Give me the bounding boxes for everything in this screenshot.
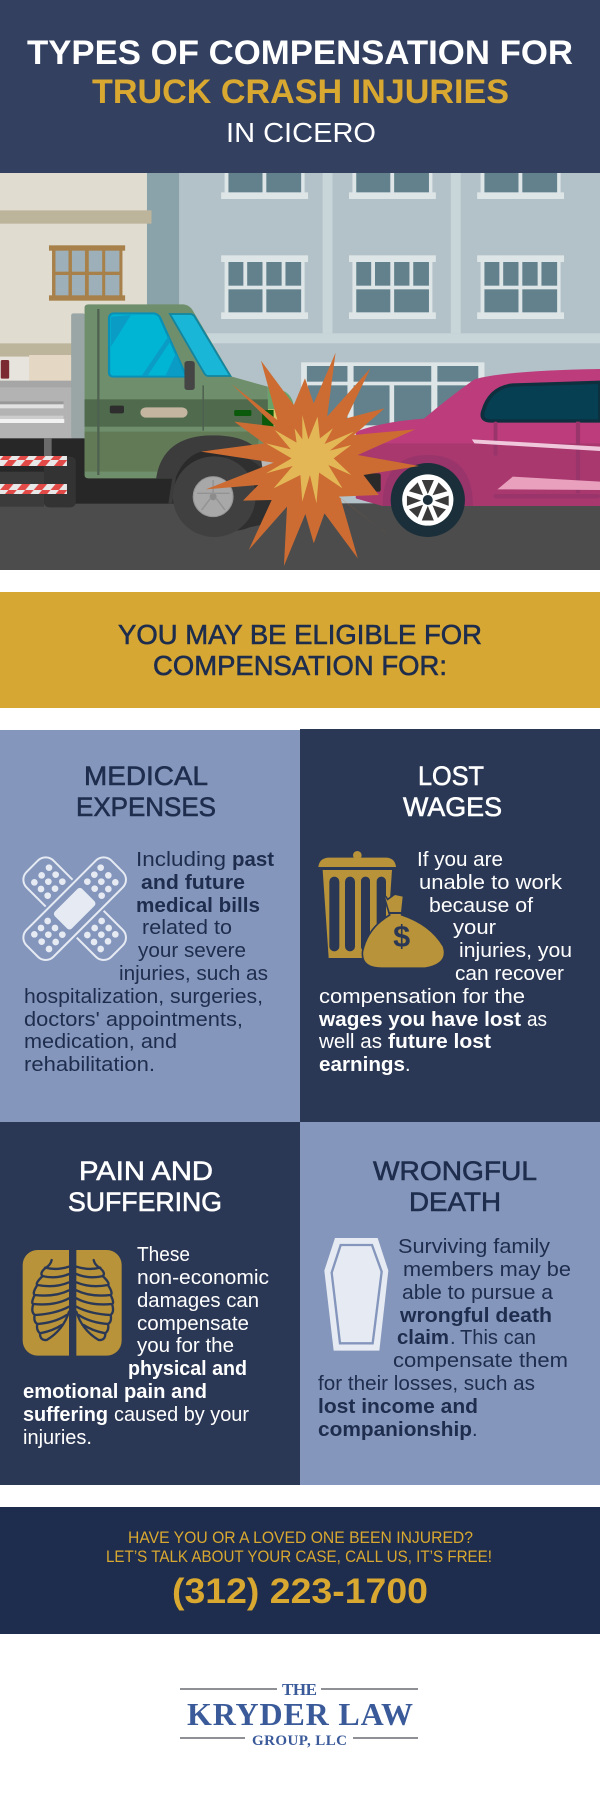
text: wrongful death description: members may be (403, 1259, 571, 1281)
call to action text: LET’S TALK ABOUT YOUR CASE, CALL US, IT’S FREE! (106, 1548, 492, 1566)
text: lost wages description: . (405, 1054, 411, 1076)
title line 2: TRUCK CRASH INJURIES (92, 73, 509, 111)
text: lost wages description: your (453, 917, 496, 939)
text: lost wages description: injuries, you (459, 940, 572, 962)
text: medical expenses description: rehabilitation. (24, 1054, 155, 1076)
heading: wrongful death: WRONGFUL (373, 1156, 537, 1186)
eligibility banner: COMPENSATION FOR: (153, 650, 447, 681)
text: pain and suffering description: non-economic (137, 1267, 269, 1289)
text: lost wages description: compensation for the (319, 986, 525, 1008)
text: lost wages description: wages you have lost (318, 1009, 521, 1031)
icon: crossed bandages (19, 853, 131, 965)
text: lost wages description: because of (429, 895, 533, 917)
heading: lost wages (403, 761, 502, 822)
text: medical expenses description (24, 849, 274, 1076)
text: wrongful death description: for their losses, such as (318, 1373, 535, 1395)
heading: pain and suffering (68, 1156, 222, 1217)
title line 1: TYPES OF COMPENSATION FOR (27, 34, 573, 72)
panel: lost wages (300, 729, 600, 1122)
panel: pain and suffering (0, 1122, 300, 1485)
text: medical expenses description: medication, and (24, 1031, 177, 1053)
text: pain and suffering description: These (137, 1244, 190, 1266)
text: pain and suffering description: caused by your (114, 1404, 249, 1426)
text: lost wages description: can recover (455, 963, 564, 985)
text: wrongful death description (318, 1236, 571, 1441)
text: medical expenses description: and future (141, 872, 245, 894)
text: pain and suffering description: compensate (137, 1313, 249, 1335)
text: lost wages description: earnings (319, 1054, 405, 1076)
text: pain and suffering description: physical and (128, 1358, 247, 1380)
truck cab (85, 304, 294, 530)
logo: The Kryder Law Group, LLC (180, 1680, 418, 1749)
heading: wrongful death: DEATH (409, 1187, 501, 1217)
eligibility banner: YOU MAY BE ELIGIBLE FOR (118, 619, 482, 650)
eligibility banner (0, 592, 600, 708)
text: lost wages description: well as (318, 1031, 382, 1053)
brown window (49, 245, 125, 301)
truck bed and cargo (0, 313, 180, 507)
text: wrongful death description: companionship (318, 1419, 472, 1441)
text: medical expenses description: medical bills (136, 895, 260, 917)
text: wrongful death description: compensate them (393, 1350, 568, 1372)
text: wrongful death description: lost income and (318, 1396, 478, 1418)
text: medical expenses description: doctors' appointments, (24, 1009, 243, 1031)
explosion (201, 353, 419, 566)
heading: lost wages: LOST (418, 761, 484, 791)
text: wrongful death description: This can (460, 1327, 536, 1349)
icon: coffin (324, 1238, 388, 1351)
text: pain and suffering description: damages can (137, 1290, 259, 1312)
panel: medical expenses (0, 730, 300, 1122)
heading: pain and suffering: PAIN AND (79, 1156, 213, 1186)
heading: medical expenses: EXPENSES (76, 792, 216, 822)
text: wrongful death description: able to pursue a (402, 1282, 554, 1304)
text: lost wages description: If you are (417, 849, 503, 871)
icon: rib cage (23, 1248, 122, 1357)
text: wrongful death description: claim (397, 1327, 449, 1349)
text: wrongful death description: wrongful death (399, 1305, 552, 1327)
icon: trash can and money bag: $ (393, 920, 410, 954)
truck wheel (173, 456, 271, 537)
text: medical expenses description: Including (136, 849, 226, 871)
heading: medical expenses (76, 761, 216, 822)
text: pain and suffering description (23, 1244, 269, 1449)
text: wrongful death description: . (472, 1419, 478, 1441)
heading: medical expenses: MEDICAL (84, 761, 208, 791)
car wheel (391, 463, 465, 537)
text: pain and suffering description: suffering (23, 1404, 108, 1426)
header panel (0, 0, 600, 173)
text: wrongful death description: . (450, 1327, 456, 1349)
text: medical expenses description: related to (142, 917, 232, 939)
road (0, 503, 600, 570)
illustration: truck and car crash scene (0, 160, 600, 570)
heading: pain and suffering: SUFFERING (68, 1187, 222, 1217)
text: wrongful death description: Surviving family (398, 1236, 550, 1258)
text: pain and suffering description: emotional pain and (23, 1381, 207, 1403)
text: lost wages description: future lost (388, 1031, 491, 1053)
panel: wrongful death (300, 1122, 600, 1485)
text: medical expenses description: your severe (138, 940, 246, 962)
building windows (221, 160, 564, 319)
logo: The Kryder Law Group, LLC: KRYDER LAW (187, 1696, 413, 1732)
icon: trash can and money bag (318, 851, 444, 967)
text: pain and suffering description: injuries. (23, 1427, 92, 1449)
text: lost wages description: unable to work (419, 872, 563, 894)
subtitle: IN CICERO (226, 117, 376, 148)
text: medical expenses description: injuries, such as (119, 963, 268, 985)
call to action text: HAVE YOU OR A LOVED ONE BEEN INJURED? (128, 1529, 473, 1547)
text: medical expenses description: past (232, 849, 274, 871)
text: medical expenses description: hospitalization, surgeries, (24, 986, 263, 1008)
heading: wrongful death (373, 1156, 537, 1217)
heading: lost wages: WAGES (403, 792, 502, 822)
text: lost wages description (318, 849, 572, 1076)
text: lost wages description: as (527, 1009, 547, 1031)
logo: The Kryder Law Group, LLC: GROUP, LLC (252, 1733, 347, 1749)
phone number: (312) 223-1700 (172, 1572, 428, 1611)
logo: The Kryder Law Group, LLC: THE (282, 1680, 317, 1699)
text: pain and suffering description: you for the (137, 1335, 234, 1357)
call to action text (106, 1529, 492, 1566)
call to action panel (0, 1507, 600, 1634)
car (356, 369, 600, 537)
lower window (301, 362, 484, 442)
